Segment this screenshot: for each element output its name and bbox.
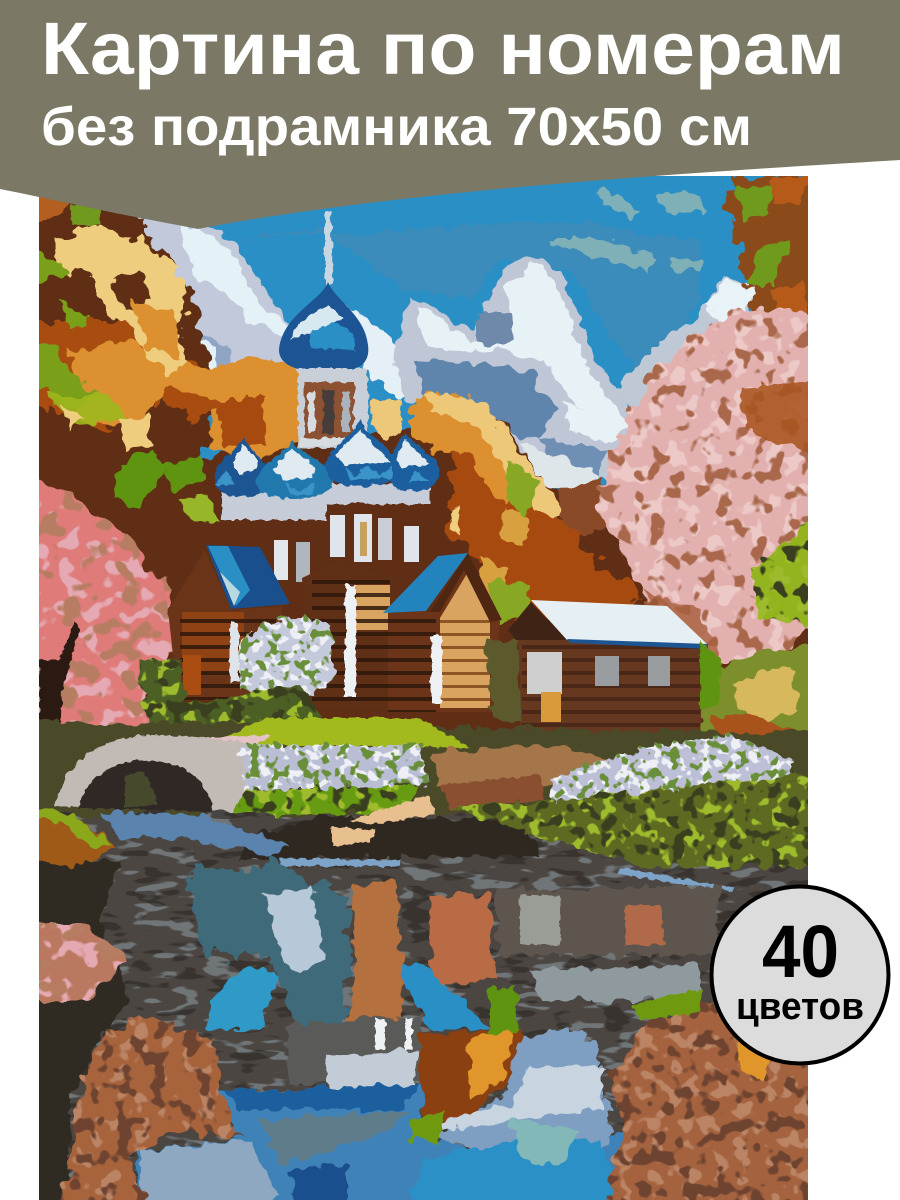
white flowers on the bank — [240, 735, 795, 808]
lime and yellow accents — [632, 990, 702, 1020]
right lime foliage — [700, 522, 808, 736]
left shadow — [39, 858, 130, 1200]
bottom right reflected foliage — [600, 1000, 830, 1200]
far bank reflection — [495, 885, 720, 955]
right cabin — [508, 600, 722, 738]
orange church reflection — [345, 880, 405, 1025]
left autumn tree — [39, 197, 260, 524]
four small domes — [215, 420, 440, 499]
shore shadow — [240, 815, 540, 860]
clouds — [130, 212, 757, 490]
grey church tower reflection — [285, 1015, 430, 1085]
right wooden wing — [383, 553, 502, 712]
teal reflection — [190, 865, 350, 1040]
spire — [325, 212, 333, 285]
blue reflections left and right — [205, 965, 280, 1030]
path and steps — [330, 795, 435, 845]
painting — [10, 176, 830, 1200]
white behind dome — [345, 304, 404, 400]
white blossoming bush — [238, 617, 335, 705]
title: Картина по номерам — [41, 7, 845, 90]
pale cloud reflection lower right — [430, 1030, 610, 1180]
pink reflection — [15, 925, 128, 1000]
top right foliage — [722, 176, 808, 315]
dark bushes at left of church — [135, 660, 320, 735]
light cloud reflection — [265, 885, 325, 975]
autumn backdrop behind buildings — [144, 356, 808, 731]
main dome — [279, 282, 368, 371]
left wooden wing — [168, 545, 290, 700]
bell tower — [298, 368, 368, 448]
centre wooden wing — [302, 574, 390, 701]
right bank — [445, 770, 825, 868]
badge number: 40 — [762, 910, 839, 993]
left pink tree — [39, 480, 173, 726]
central cloud — [395, 256, 632, 482]
left cloud — [130, 212, 300, 400]
dark trunk — [39, 621, 80, 724]
left bank — [20, 800, 118, 868]
pond water — [15, 770, 830, 1200]
orange reflection — [420, 1030, 520, 1125]
top water highlights — [100, 812, 290, 855]
blue bottom centre — [135, 1085, 640, 1200]
subtitle: без подрамника 70х50 см — [41, 97, 752, 157]
bottom left reflected foliage — [60, 1015, 240, 1200]
church — [168, 212, 502, 712]
olive bush beside cabin — [486, 640, 525, 725]
badge label: цветов — [736, 986, 864, 1028]
stone bridge — [55, 735, 272, 812]
ground — [39, 716, 808, 819]
banner — [0, 0, 900, 229]
church body — [222, 484, 430, 582]
sky — [200, 176, 808, 490]
right pink tree — [598, 308, 830, 660]
badge: 40 colours — [712, 886, 888, 1064]
right cloud — [610, 280, 757, 412]
